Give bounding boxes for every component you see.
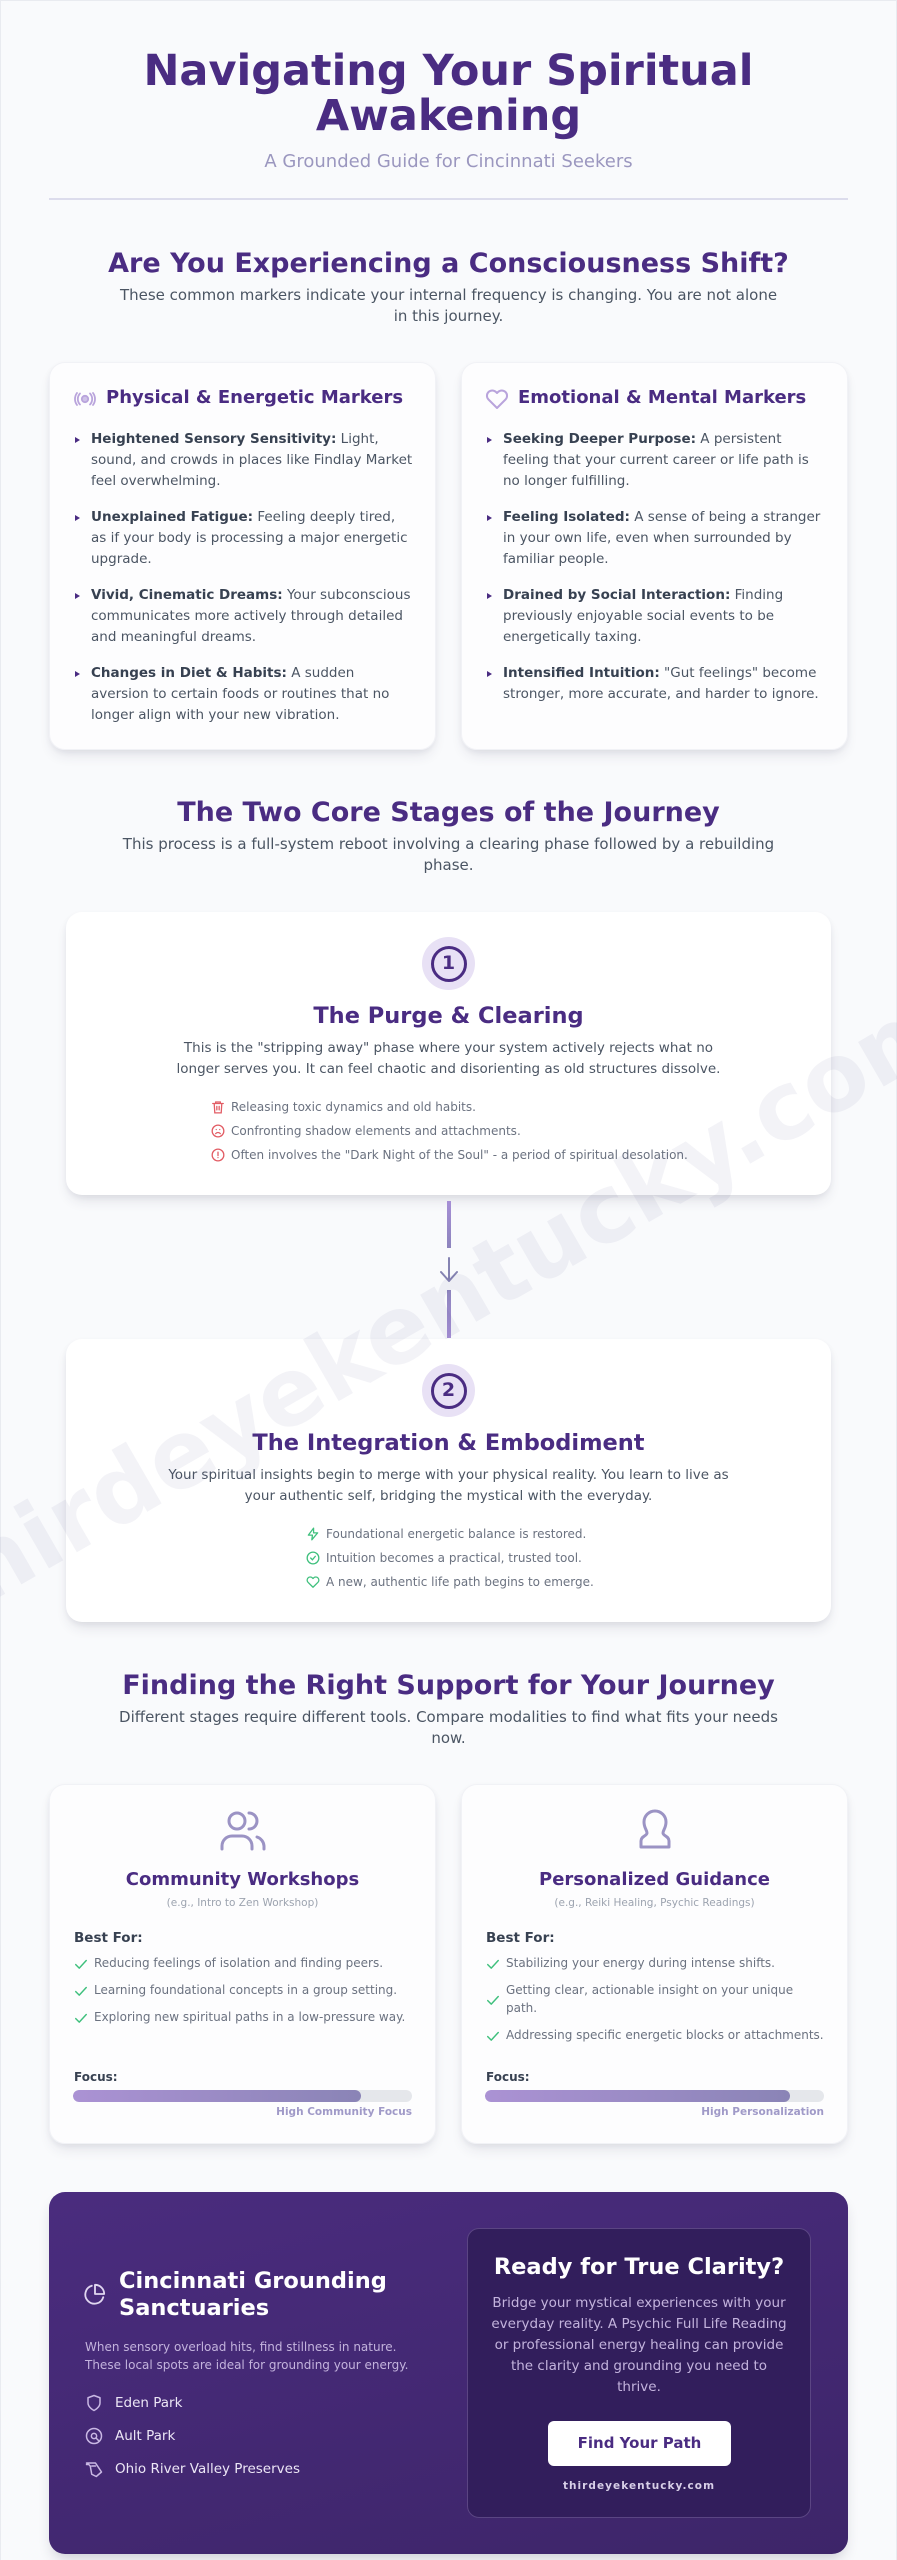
heading: stage 1: The Purge & Clearing — [313, 1003, 584, 1029]
connector line top — [447, 1201, 451, 1248]
marker 2: in your own life, even when surrounded by — [503, 530, 792, 546]
list: physical markers — [75, 431, 412, 723]
label: best for: Best For: — [486, 1930, 555, 1946]
marker 2: Feeling Isolated: A sense of being a stranger — [503, 509, 820, 525]
list: guidance benefits — [487, 1956, 824, 2042]
icon: people — [220, 1812, 266, 1850]
intro: two core stages — [122, 835, 774, 874]
intro: finding support: now. — [431, 1729, 466, 1747]
marker 3 — [487, 587, 783, 645]
progress bar: personalization focus — [485, 2090, 824, 2102]
marker 1: Seeking Deeper Purpose: A persistent — [503, 431, 782, 447]
icon: stage 2 number — [422, 1364, 475, 1417]
icon: single person — [640, 1810, 670, 1848]
link: website: thirdeyekentucky.com — [563, 2480, 715, 2492]
benefit 3: Exploring new spiritual paths in a low-pressure way. — [94, 2010, 405, 2024]
panel: personalized guidance — [461, 1784, 848, 2144]
place: Ault Park: Ault Park — [115, 2428, 175, 2444]
marker 3: and meaningful dreams. — [91, 629, 256, 645]
heading: community workshops: Community Workshops — [126, 1869, 359, 1890]
heading: call to action: Ready for True Clarity? — [494, 2254, 784, 2280]
button: find your path — [548, 2421, 731, 2466]
heading: grounding sanctuaries: Cincinnati Grounding — [119, 2268, 387, 2294]
text: stage 1: This is the "stripping away" phase where your system actively rejects what no — [184, 1040, 713, 1056]
text: call to action: the clarity and grounding you need to — [511, 2358, 767, 2374]
panel: stage 1 — [66, 912, 831, 1195]
icon: radio waves — [74, 392, 96, 406]
progress bar: community focus — [73, 2090, 412, 2102]
list: emotional markers — [487, 431, 820, 702]
marker 2: Unexplained Fatigue: Feeling deeply tired, — [91, 509, 395, 525]
intro: consciousness shift: These common markers indicate your internal frequency is changing. You are not alone — [120, 286, 777, 304]
point: alert icon and text: Often involves the "Dark Night of the Soul" - a period of spiritual desolation. — [231, 1148, 688, 1162]
heading: grounding sanctuaries: Sanctuaries — [119, 2295, 269, 2321]
marker 2: upgrade. — [91, 551, 152, 567]
marker 3: energetically taxing. — [503, 629, 642, 645]
marker 1: no longer fulfilling. — [503, 473, 630, 489]
benefit 1: Stabilizing your energy during intense shifts. — [506, 1956, 775, 1970]
text: call to action: or professional energy healing can provide — [495, 2337, 783, 2353]
point: heart icon and text: A new, authentic life path begins to emerge. — [326, 1575, 594, 1589]
marker 4: longer align with your new vibration. — [91, 707, 340, 723]
list: stage 1 points — [212, 1100, 688, 1162]
benefit 2: Learning foundational concepts in a group setting. — [94, 1983, 397, 1997]
icon: down arrow — [440, 1257, 458, 1282]
example: personalized guidance: (e.g., Reiki Healing, Psychic Readings) — [554, 1897, 755, 1909]
point: frown icon and text: Confronting shadow elements and attachments. — [231, 1124, 521, 1138]
text: call to action — [467, 2293, 811, 2398]
marker 3: Vivid, Cinematic Dreams: Your subconscious — [91, 587, 411, 603]
marker 3: Drained by Social Interaction: Finding — [503, 587, 783, 603]
marker 2: as if your body is processing a major energetic — [91, 530, 408, 546]
list: stage 2 points — [306, 1527, 594, 1589]
label: focus: Focus: — [486, 2070, 530, 2084]
marker 2 — [75, 509, 408, 567]
marker 3 — [75, 587, 411, 645]
panel: grounding and call to action — [49, 2192, 848, 2554]
heading: stage 2: The Integration & Embodiment — [252, 1430, 645, 1456]
connector line bottom — [447, 1290, 451, 1338]
title: Awakening — [316, 91, 581, 141]
marker 1: feeling that your current career or life path is — [503, 452, 809, 468]
caption: personalization focus: High Personalization — [701, 2106, 824, 2118]
marker 1: sound, and crowds in places like Findlay Market — [91, 452, 412, 468]
marker 1 — [75, 431, 412, 489]
place: Ohio River Valley Preserves: Ohio River Valley Preserves — [115, 2461, 300, 2477]
heading: consciousness shift: Are You Experiencing a Consciousness Shift? — [108, 248, 789, 279]
benefit 1: Reducing feelings of isolation and finding peers. — [94, 1956, 383, 1970]
header divider — [49, 198, 848, 200]
title — [143, 46, 754, 141]
heading: personalized guidance: Personalized Guidance — [539, 1869, 770, 1890]
text: grounding description: These local spots are ideal for grounding your energy. — [85, 2358, 408, 2372]
text: stage 1 — [177, 1040, 720, 1077]
icon: stage 1 number — [422, 937, 475, 990]
point: bolt icon and text: Foundational energetic balance is restored. — [326, 1527, 586, 1541]
heading: grounding sanctuaries — [119, 2268, 387, 2321]
point: check circle icon and text: Intuition becomes a practical, trusted tool. — [326, 1551, 582, 1565]
intro: finding support — [119, 1708, 778, 1747]
text: stage 2: Your spiritual insights begin to merge with your physical reality. You learn to live as — [168, 1467, 729, 1483]
label: best for: Best For: — [74, 1930, 143, 1946]
heading: two core stages: The Two Core Stages of the Journey — [177, 797, 720, 828]
text: call to action: thrive. — [617, 2379, 661, 2395]
icon: stage 2 number: 2 — [442, 1379, 455, 1401]
marker 4 — [487, 665, 819, 702]
place: Eden Park: Eden Park — [115, 2395, 182, 2411]
marker 4: aversion to certain foods or routines that no — [91, 686, 389, 702]
marker 4: stronger, more accurate, and harder to ignore. — [503, 686, 819, 702]
title: Navigating Your Spiritual — [143, 46, 754, 96]
intro: two core stages: phase. — [423, 856, 474, 874]
marker 4: Intensified Intuition: "Gut feelings" become — [503, 665, 816, 681]
text: call to action: Bridge your mystical experiences with your — [492, 2295, 786, 2311]
panel: emotional and mental markers — [461, 362, 848, 750]
panel: stage 2 — [66, 1339, 831, 1622]
marker 2 — [487, 509, 820, 567]
marker 2: familiar people. — [503, 551, 609, 567]
intro: two core stages: This process is a full-system reboot involving a clearing phase followed by a rebuilding — [123, 835, 774, 853]
marker 3: communicates more actively through detailed — [91, 608, 403, 624]
panel: call to action — [467, 2228, 811, 2518]
text: stage 2 — [168, 1467, 729, 1504]
benefit 3: Addressing specific energetic blocks or attachments. — [506, 2028, 824, 2042]
icon: stage 1 number: 1 — [442, 952, 455, 974]
marker 1: feel overwhelming. — [91, 473, 220, 489]
marker 3: previously enjoyable social events to be — [503, 608, 774, 624]
marker 4 — [75, 665, 389, 723]
list: sanctuaries — [85, 2390, 385, 2482]
intro: consciousness shift — [120, 286, 777, 325]
intro: finding support: Different stages require different tools. Compare modalities to find what fits your needs — [119, 1708, 778, 1726]
text: grounding description: When sensory overload hits, find stillness in nature. — [85, 2340, 396, 2354]
intro: consciousness shift: in this journey. — [394, 307, 503, 325]
list: community benefits — [75, 1956, 405, 2024]
panel: community workshops — [49, 1784, 436, 2144]
heading: emotional markers: Emotional & Mental Markers — [518, 387, 806, 408]
icon: pie chart — [84, 2284, 106, 2305]
benefit 2: path. — [506, 2001, 537, 2015]
marker 1: Heightened Sensory Sensitivity: Light, — [91, 431, 379, 447]
caption: community focus: High Community Focus — [276, 2106, 412, 2118]
subtitle: A Grounded Guide for Cincinnati Seekers — [264, 151, 633, 172]
button: find your path: Find Your Path — [578, 2434, 701, 2452]
marker 1 — [487, 431, 809, 489]
heading: finding support: Finding the Right Support for Your Journey — [122, 1670, 775, 1701]
heading: physical markers: Physical & Energetic Markers — [106, 387, 403, 408]
benefit 2 — [487, 1983, 793, 2015]
example: community workshops: (e.g., Intro to Zen Workshop) — [167, 1897, 318, 1909]
panel: physical and energetic markers — [49, 362, 436, 750]
text: call to action: everyday reality. A Psychic Full Life Reading — [491, 2316, 787, 2332]
text: grounding description — [84, 2340, 408, 2372]
benefit 2: Getting clear, actionable insight on your unique — [506, 1983, 793, 1997]
label: focus: Focus: — [74, 2070, 118, 2084]
text: stage 1: longer serves you. It can feel chaotic and disorienting as old structures dissolve. — [177, 1061, 720, 1077]
icon: heart — [486, 390, 508, 409]
point: trash icon and text: Releasing toxic dynamics and old habits. — [231, 1100, 476, 1114]
marker 4: Changes in Diet & Habits: A sudden — [91, 665, 354, 681]
text: stage 2: your authentic self, bridging the mystical with the everyday. — [245, 1488, 652, 1504]
